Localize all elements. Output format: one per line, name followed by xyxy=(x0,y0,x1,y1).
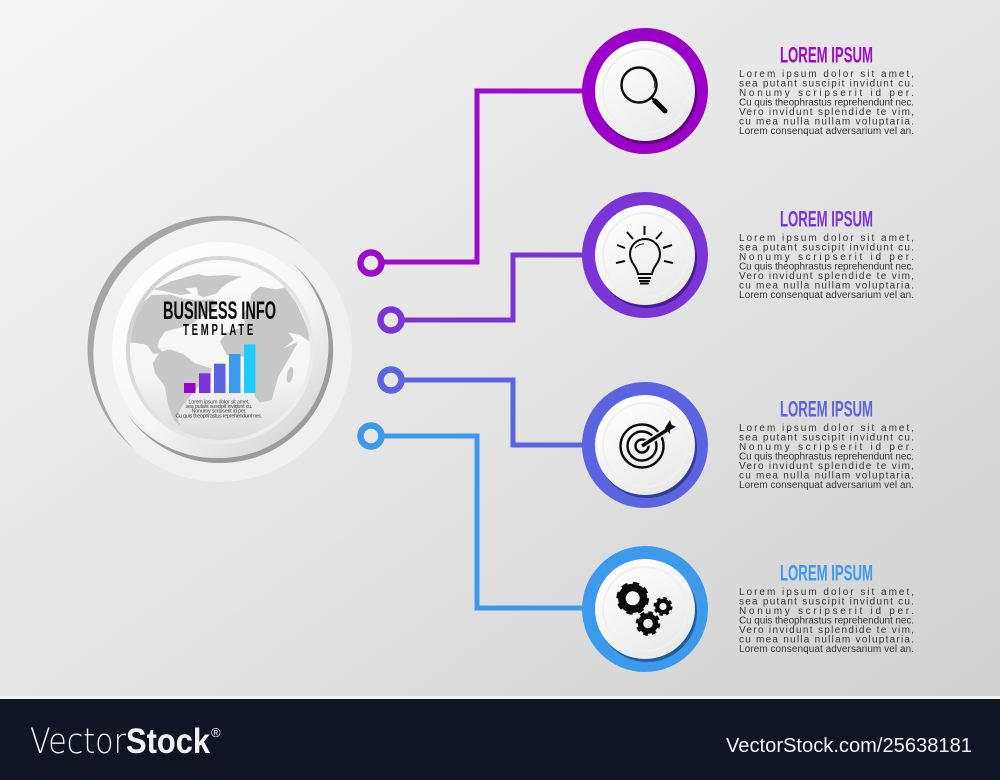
node 4 text: cu mea nulla nullam voluptaria. xyxy=(739,634,914,646)
node 2 text: LOREM IPSUM xyxy=(780,206,873,232)
node 4 text: Cu quis theophrastus reprehendunt nec. xyxy=(739,616,914,626)
node 3 text: cu mea nulla nullam voluptaria. xyxy=(739,470,914,482)
node 1 text: Nonumy scripserit id per. xyxy=(739,88,914,99)
globe face xyxy=(130,260,310,440)
lower-right gray crescent xyxy=(127,262,333,463)
node 2 text: Nonumy scripserit id per. xyxy=(739,252,914,263)
badge subtitle: TEMPLATE xyxy=(183,320,256,339)
badge caption: Cu quis theophrastus reprehendunt nec. xyxy=(176,413,262,419)
node 2 text: sea putant suscipit invidunt cu. xyxy=(739,242,914,254)
node 4 text xyxy=(739,560,914,655)
node 2 text: Lorem consenquat adversarium vel an. xyxy=(739,290,914,301)
node 3 text: Nonumy scripserit id per. xyxy=(739,442,914,453)
badge title: BUSINESS INFO xyxy=(163,297,276,325)
footer band xyxy=(0,696,1000,780)
node 1: search xyxy=(582,28,708,154)
node 2 text: Cu quis theophrastus reprehendunt nec. xyxy=(739,262,914,272)
central globe badge xyxy=(88,216,352,482)
connector 3 xyxy=(380,370,585,445)
node 4 text: sea putant suscipit invidunt cu. xyxy=(739,596,914,608)
node 1 text: LOREM IPSUM xyxy=(780,42,873,68)
node 3: target xyxy=(582,382,708,508)
node 1 text: cu mea nulla nullam voluptaria. xyxy=(739,116,914,128)
icon: gears xyxy=(618,584,671,634)
node 1 text: Lorem consenquat adversarium vel an. xyxy=(739,126,914,137)
node 1 text: Lorem ipsum dolor sit amet, xyxy=(739,69,914,80)
connector 4 xyxy=(360,426,585,608)
upper-left gray crescent xyxy=(88,216,303,450)
world map xyxy=(123,274,310,427)
node 4 text: Lorem consenquat adversarium vel an. xyxy=(739,644,914,655)
node 4 text: Vero invidunt splendide te vim, xyxy=(739,625,914,636)
node 1 text: sea putant suscipit invidunt cu. xyxy=(739,78,914,90)
icon: magnifier xyxy=(622,68,665,111)
badge caption: Lorem ipsum dolor sit amet, xyxy=(188,400,250,406)
node 4 text: Nonumy scripserit id per. xyxy=(739,606,914,617)
badge caption: sea putant suscipit invidunt cu. xyxy=(186,404,252,410)
node 1 text: Cu quis theophrastus reprehendunt nec. xyxy=(739,98,914,108)
globe ring xyxy=(128,258,312,442)
pale outer disc xyxy=(88,218,352,482)
node 4: settings xyxy=(582,546,708,672)
connector 1 xyxy=(360,91,585,274)
node 2: idea xyxy=(582,192,708,318)
node 4 text: Lorem ipsum dolor sit amet, xyxy=(739,587,914,598)
node 3 text: sea putant suscipit invidunt cu. xyxy=(739,432,914,444)
badge caption: Nonumy scripserit id per. xyxy=(192,409,246,415)
icon: target with arrow xyxy=(620,420,676,468)
node 3 text: Lorem ipsum dolor sit amet, xyxy=(739,423,914,434)
inner white disc xyxy=(112,242,328,458)
icon: light bulb xyxy=(616,226,673,284)
node 3 text: Lorem consenquat adversarium vel an. xyxy=(739,480,914,491)
node 3 text: LOREM IPSUM xyxy=(780,396,873,422)
node 2 text: Lorem ipsum dolor sit amet, xyxy=(739,233,914,244)
connector 2 xyxy=(380,255,585,330)
node 2 text: cu mea nulla nullam voluptaria. xyxy=(739,280,914,292)
bar chart xyxy=(184,344,256,393)
node 2 text xyxy=(739,206,914,301)
node 3 text: Cu quis theophrastus reprehendunt nec. xyxy=(739,452,914,462)
footer registered mark: ® xyxy=(211,725,221,740)
node 3 text: Vero invidunt splendide te vim, xyxy=(739,461,914,472)
node 4 text: LOREM IPSUM xyxy=(780,560,873,586)
node 3 text xyxy=(739,396,914,491)
node 1 text: Vero invidunt splendide te vim, xyxy=(739,107,914,118)
node 1 text xyxy=(739,42,914,137)
footer logo: VectorStock xyxy=(30,722,210,762)
footer image id: VectorStock.com/25638181 xyxy=(726,735,972,757)
badge caption xyxy=(176,400,262,419)
node 2 text: Vero invidunt splendide te vim, xyxy=(739,271,914,282)
